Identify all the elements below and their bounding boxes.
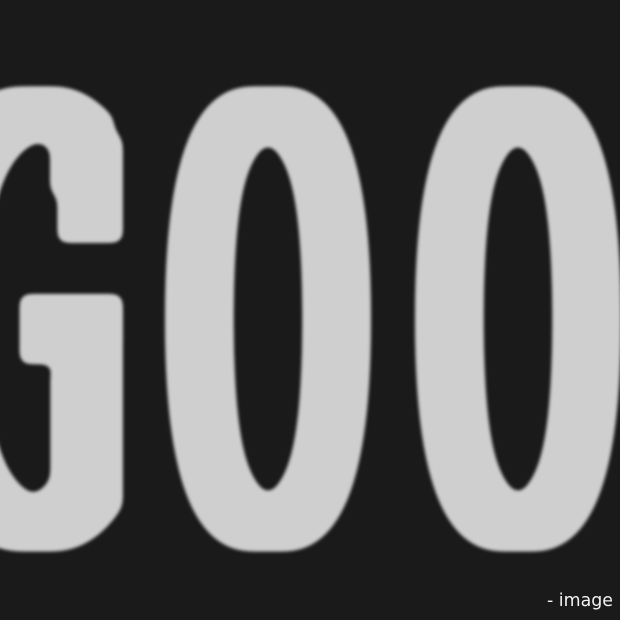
headline letters: GOO <box>0 84 620 554</box>
caption: - image <box>547 591 613 611</box>
